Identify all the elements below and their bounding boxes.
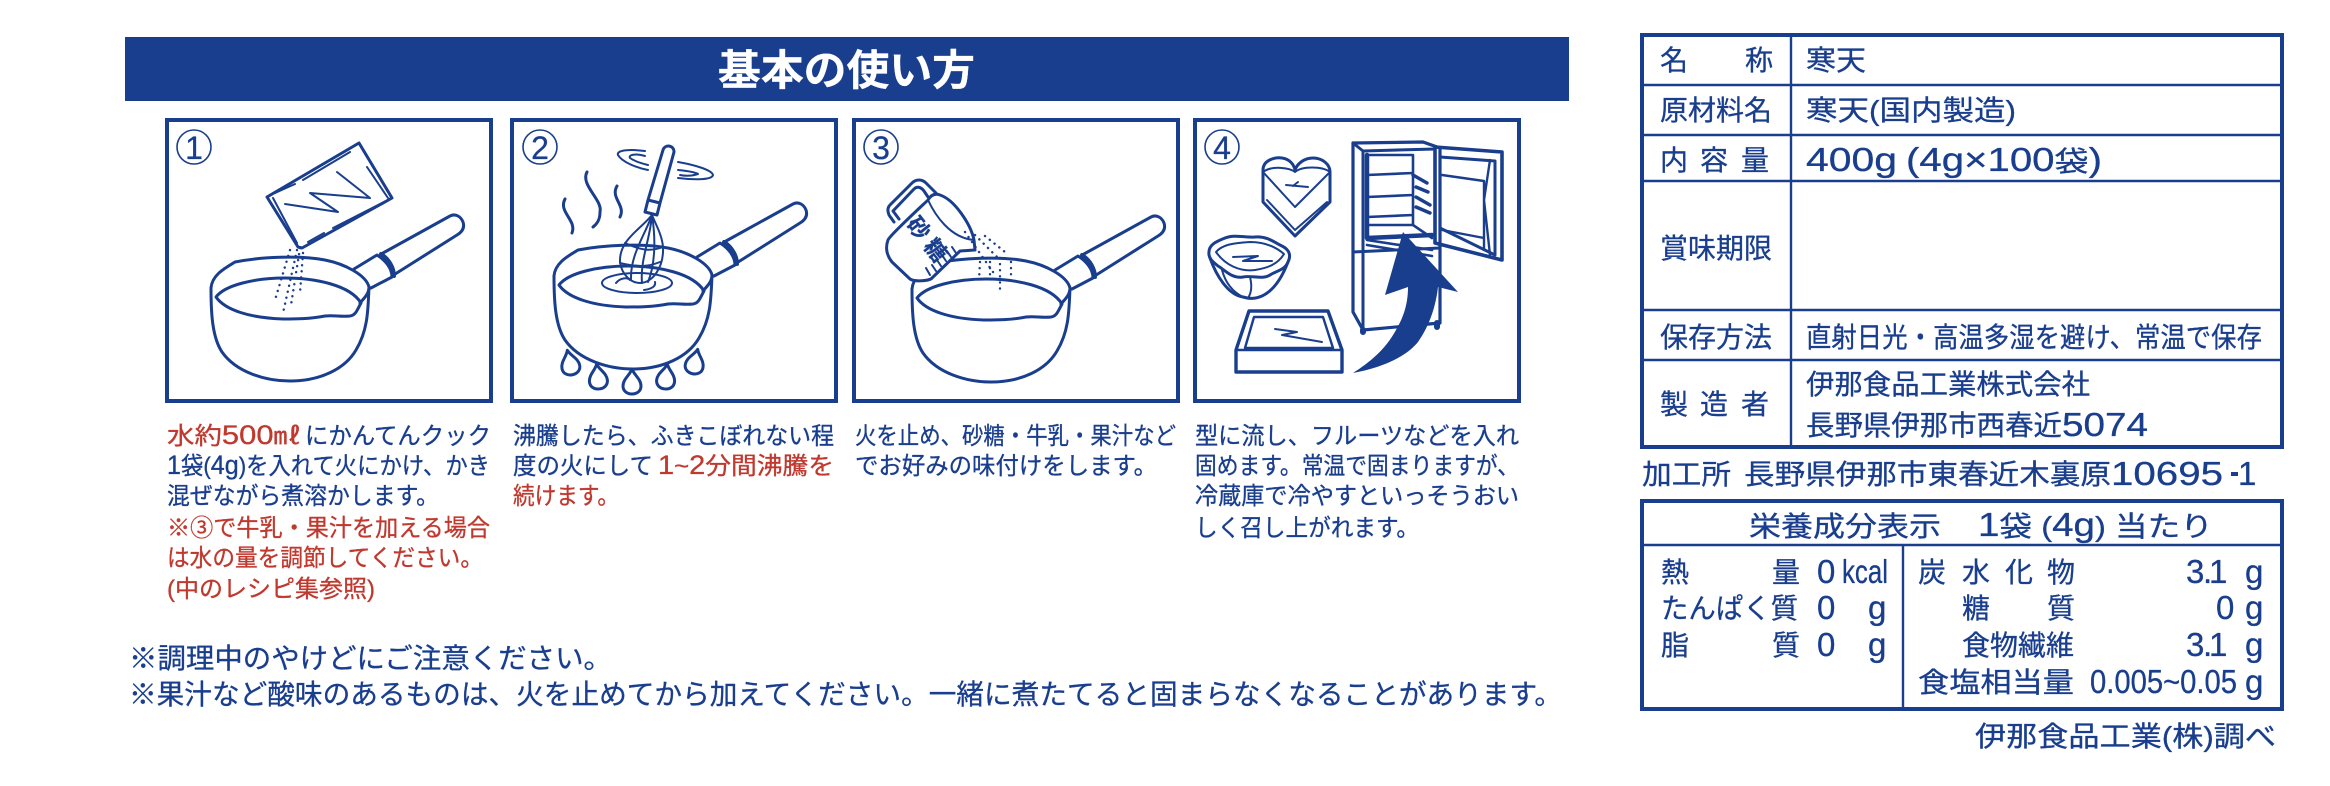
panel: product information table: 400g [1806,141,1897,178]
text: cautions: ※果汁など酸味のあるものは、火を止めてから加えてください。一緒に煮たてると固まらなくなることがあります。 [129,679,1562,710]
step number 1 [177,130,211,166]
panel: nutrition facts table: 3.1 [2186,626,2227,663]
text: step 2 instructions: 1~2分間沸騰を [658,450,834,480]
icon: whisking in pan over flame [554,146,807,394]
panel: product information table: 原材料名 [1660,95,1772,126]
panel: nutrition facts table: g [2245,663,2263,700]
text: analysis source: 伊那食品工業(株)調べ [1975,721,2276,752]
panel: nutrition facts table: 脂質 [1661,630,1800,661]
icon: sachet pouring into pan [211,143,464,381]
panel: product information table: (4g×100 袋) [1906,141,2102,178]
text: cautions: ※調理中のやけどにご注意ください。 [129,643,612,674]
text: processing plant address: 加工所 [1642,459,1731,490]
panel: product information table: 製造者 [1660,389,1769,420]
panel: nutrition facts table: g [1868,626,1886,663]
text: step 3 instructions: 火を止め、砂糖・牛乳・果汁など [855,423,1176,450]
panel: nutrition facts table [1642,501,2282,709]
text: processing plant address [1642,455,2256,492]
panel: product information table: 寒天(国内製造) [1806,95,2016,126]
icon: square mould [1236,311,1342,372]
title banner [125,37,1569,101]
text: cautions [129,643,1562,710]
panel: product information table: 内容量 [1660,145,1769,176]
panel: nutrition facts table: 0 [1817,589,1835,626]
panel: nutrition facts table: 熱量 [1661,557,1800,588]
panel: step 2 [512,120,836,401]
panel: product information table: 伊那食品工業株式会社 [1806,369,2090,400]
panel: product information table: 賞味期限 [1660,233,1772,264]
text: step 1 instructions [167,420,491,603]
text: step 2 instructions: 沸騰したら、ふきこぼれない程 [513,423,834,450]
text: step 3 instructions [855,423,1176,480]
heading: 基本の使い方 [718,47,975,94]
step number 2 [523,130,557,166]
panel: product information table: 保存方法 [1660,322,1772,353]
panel: nutrition facts table: 0 [1817,553,1835,590]
panel: nutrition facts table: 0 [1817,626,1835,663]
text: step 4 instructions [1195,423,1519,542]
text: step 4 instructions: 冷蔵庫で冷やすといっそうおい [1195,483,1519,510]
panel: product information table: 名称 [1660,45,1773,76]
panel: nutrition facts table: 0 [2216,589,2234,626]
panel: nutrition facts table: 食塩相当量 [1918,667,2074,698]
label: sugar: 砂糖 [902,212,952,267]
icon: flower mould [1209,236,1290,298]
panel: step 1 [167,120,491,401]
step number 1: 1 [185,130,203,166]
icon: pouring sugar into pan [887,180,1165,382]
panel: product information table: 直射日光・高温多湿を避け、常温で保存 [1806,322,2262,353]
panel: nutrition facts table: 糖質 [1962,593,2075,624]
text: step 4 instructions: しく召し上がれます。 [1195,515,1419,542]
text: step 2 instructions: 度の火にして [513,453,653,480]
panel: step 3 [854,120,1178,401]
icon: heart mould [1263,158,1330,236]
panel: nutrition facts table: 3.1 [2186,553,2227,590]
text: step 1 instructions: ※③で牛乳・果汁を加える場合 [167,515,490,542]
arrow: into refrigerator [1353,232,1458,373]
panel: nutrition facts table: たんぱく質 [1661,593,1798,624]
panel: nutrition facts table: kcal [1842,553,1888,590]
panel: nutrition facts table: 炭水化物 [1918,557,2075,588]
panel: nutrition facts table: 1袋 (4g) 当たり [1978,506,2213,543]
text: step 2 instructions [513,423,834,510]
text: step 4 instructions: 型に流し、フルーツなどを入れ [1195,423,1519,450]
text: step 1 instructions: は水の量を調節してください。 [167,545,483,572]
panel: product information table: 5074 [2062,406,2148,443]
text: processing plant address: 10695 [2111,455,2223,492]
text: step 1 instructions: にかんてんクック [305,423,491,450]
panel: product information table: 寒天 [1806,45,1866,76]
panel: step 4 [1195,120,1519,401]
panel: nutrition facts table: g [2245,626,2263,663]
icon: refrigerator [1353,142,1502,332]
text: step 1 instructions: 1袋(4g)を入れて火にかけ、かき [167,450,490,480]
text: step 1 instructions: (中のレシピ集参照) [167,576,375,603]
panel: nutrition facts table: 0.005~0.05 [2090,663,2237,700]
text: processing plant address: 1 [2238,455,2256,492]
text: step 1 instructions: 混ぜながら煮溶かします。 [167,483,439,510]
panel: nutrition facts table: 食物繊維 [1962,630,2074,661]
panel: product information table [1642,35,2282,447]
panel: product information table: 長野県伊那市西春近 [1806,410,2062,441]
panel: nutrition facts table: g [2245,553,2263,590]
step number 2: 2 [531,130,549,166]
step number 3 [864,130,898,166]
step number 4 [1205,130,1239,166]
text: processing plant address: 長野県伊那市東春近木裏原 [1744,459,2111,490]
panel: nutrition facts table: 栄養成分表示 [1749,511,1941,542]
text: step 4 instructions: 固めます。常温で固まりますが、 [1195,453,1519,480]
text: step 3 instructions: でお好みの味付けをします。 [855,453,1157,480]
step number 3: 3 [872,130,890,166]
panel: nutrition facts table: g [2245,589,2263,626]
text: step 1 instructions: 水約 500 ㎖ [167,420,301,450]
step number 4: 4 [1213,130,1231,166]
text: step 2 instructions: 続けます。 [513,483,619,510]
panel: nutrition facts table: g [1868,589,1886,626]
